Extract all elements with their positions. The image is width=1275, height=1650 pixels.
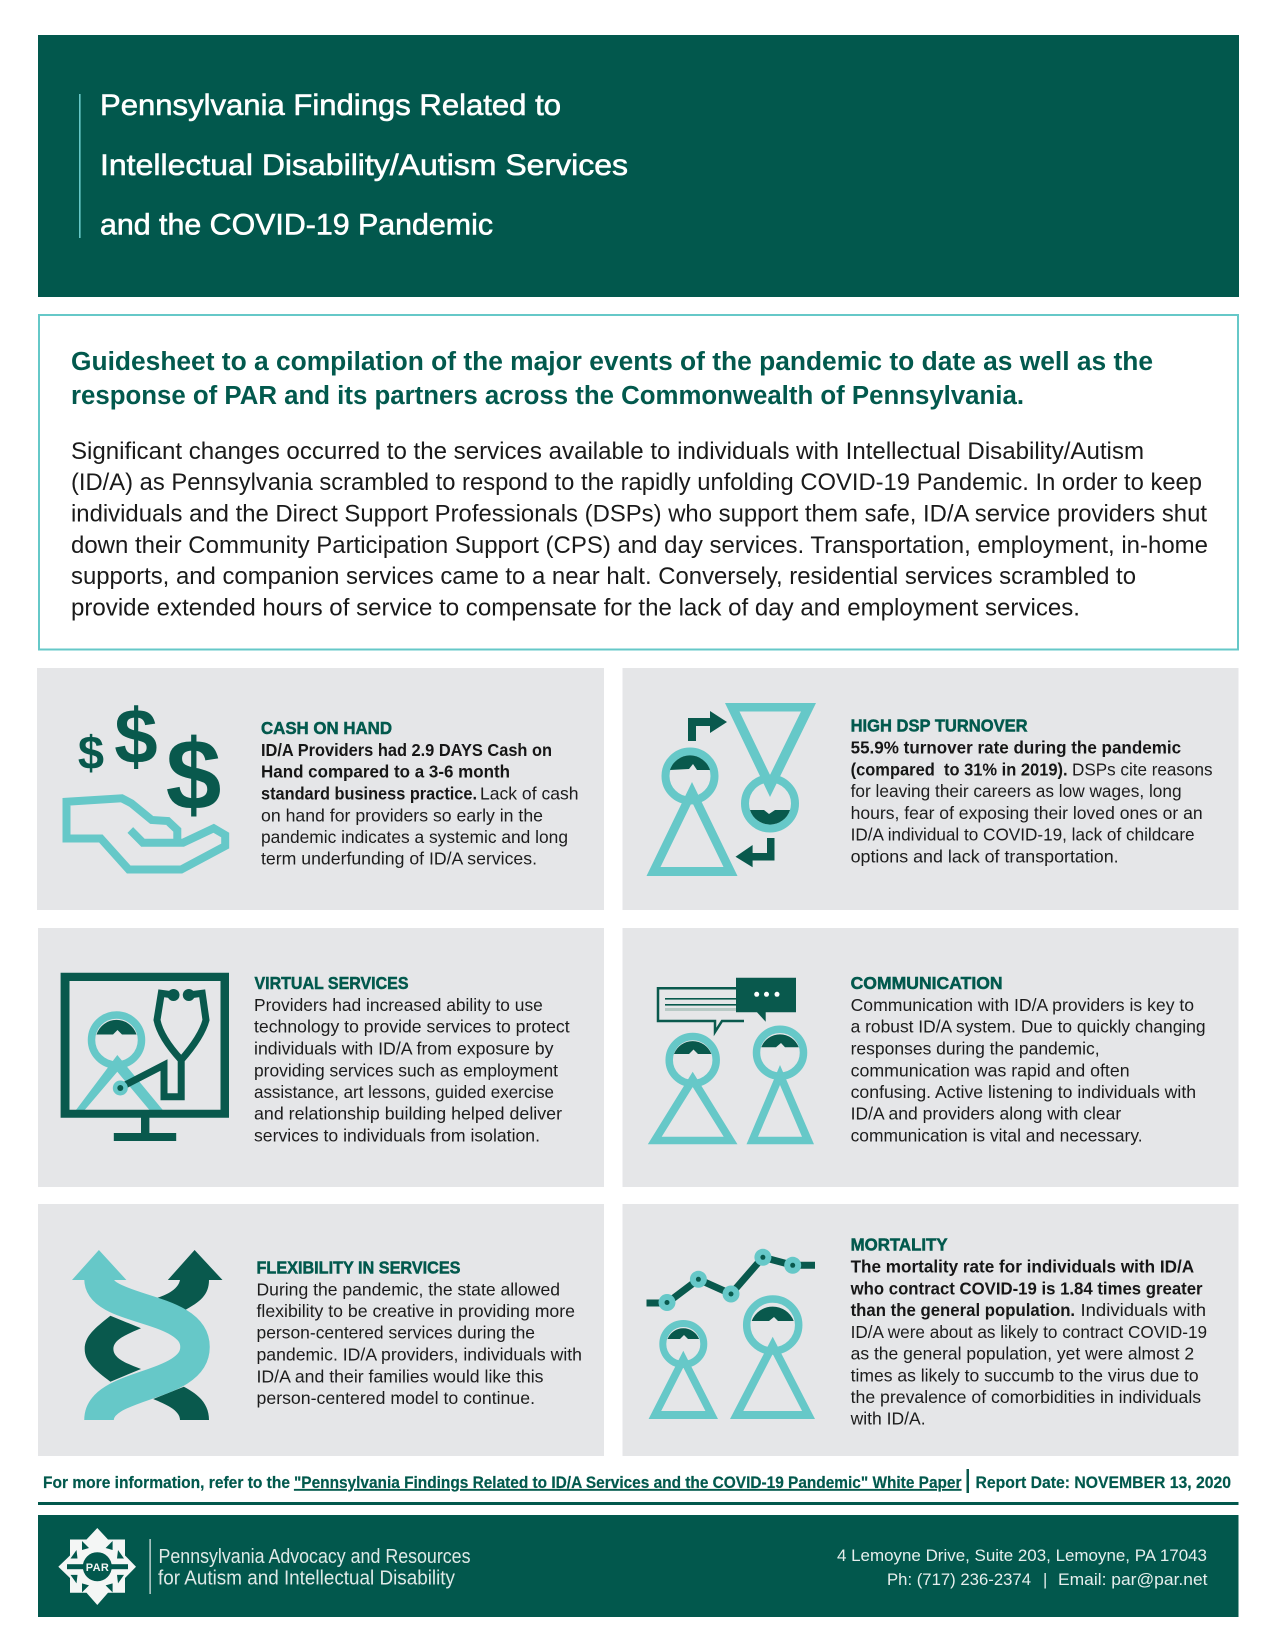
footer band xyxy=(38,1515,1238,1617)
panel: mortality xyxy=(622,1204,1238,1456)
panel: communication xyxy=(622,928,1238,1187)
introduction heading xyxy=(71,348,1153,410)
arrow: bottom xyxy=(736,838,774,867)
introduction body text: Significant changes occurred to the services available to individuals with Intellectual Disability/Autism xyxy=(71,438,1144,465)
icon: hand with dollar signs xyxy=(66,692,225,870)
icon: hand with dollar signs: $ xyxy=(78,726,104,779)
virtual services text: providing services such as employment xyxy=(254,1060,558,1080)
reference line: "Pennsylvania Findings Related to ID/A Services and the COVID-19 Pandemic" White Paper xyxy=(294,1474,962,1492)
icon: stethoscope xyxy=(113,989,206,1097)
introduction body text: supports, and companion services came to a near halt. Conversely, residential services scrambled to xyxy=(71,563,1136,590)
high DSP turnover text: options and lack of transportation. xyxy=(851,846,1119,866)
high DSP turnover text: (compared to 31% in 2019). xyxy=(851,759,1068,779)
flexibility in services text xyxy=(256,1257,582,1408)
introduction body text: provide extended hours of service to compensate for the lack of day and employment services. xyxy=(71,594,1080,622)
reference line: For more information, refer to the xyxy=(43,1474,290,1492)
reference line xyxy=(43,1469,1231,1493)
contact details: Ph: (717) 236-2374 xyxy=(887,1571,1031,1589)
icon: intertwined arrows xyxy=(72,1250,222,1420)
communication text: Communication with ID/A providers is key to xyxy=(851,995,1194,1015)
cash on hand text: pandemic indicates a systemic and long xyxy=(261,827,568,847)
title xyxy=(100,89,628,242)
communication text: COMMUNICATION xyxy=(851,973,1003,993)
introduction body text: individuals and the Direct Support Professionals (DSPs) who support them safe, ID/A service providers shut xyxy=(71,500,1207,528)
cash on hand text: Hand compared to a 3-6 month xyxy=(261,762,510,782)
mortality text xyxy=(850,1235,1207,1429)
virtual services text xyxy=(254,973,570,1145)
contact details: | xyxy=(1043,1571,1047,1589)
communication text: a robust ID/A system. Due to quickly changing xyxy=(851,1017,1206,1037)
virtual services text: services to individuals from isolation. xyxy=(254,1125,540,1145)
flexibility in services text: person-centered services during the xyxy=(256,1323,535,1343)
icon: hand with dollar signs: $ xyxy=(166,719,221,831)
panel: introduction xyxy=(39,315,1238,650)
mortality text: with ID/A. xyxy=(850,1409,926,1429)
panel: cash on hand xyxy=(37,668,604,910)
flexibility in services text: flexibility to be creative in providing more xyxy=(256,1301,575,1321)
organization name: Pennsylvania Advocacy and Resources xyxy=(158,1546,470,1568)
virtual services text: individuals with ID/A from exposure by xyxy=(254,1039,554,1059)
organization name xyxy=(158,1546,470,1590)
virtual services text: VIRTUAL SERVICES xyxy=(254,973,408,993)
reference line: Report Date: NOVEMBER 13, 2020 xyxy=(976,1474,1231,1492)
cash on hand text: CASH ON HAND xyxy=(261,718,392,738)
panel: virtual services xyxy=(38,928,604,1187)
communication text: ID/A and providers along with clear xyxy=(851,1104,1121,1124)
flexibility in services text: During the pandemic, the state allowed xyxy=(256,1279,560,1299)
flexibility in services text: person-centered model to continue. xyxy=(256,1388,535,1408)
mortality text: who contract COVID-19 is 1.84 times greater xyxy=(850,1278,1203,1298)
mortality text: ID/A were about as likely to contract COVID-19 xyxy=(851,1322,1207,1342)
flexibility in services text: pandemic. ID/A providers, individuals with xyxy=(256,1345,582,1365)
icon: hand with dollar signs: $ xyxy=(114,692,158,780)
mortality text: Individuals with xyxy=(1080,1300,1206,1320)
icon: two people talking xyxy=(648,978,814,1144)
icon: two people swapping xyxy=(646,703,816,876)
introduction heading: Guidesheet to a compilation of the major events of the pandemic to date as well as the xyxy=(71,348,1153,376)
cash on hand text xyxy=(261,718,578,869)
mortality text: than the general population. xyxy=(851,1300,1075,1320)
introduction body text: down their Community Participation Support (CPS) and day services. Transportation, employment, in-home xyxy=(71,532,1208,559)
header banner xyxy=(38,35,1239,297)
icon: line chart with two people xyxy=(646,1249,815,1419)
high DSP turnover text: DSPs cite reasons xyxy=(1072,759,1213,779)
cash on hand text: ID/A Providers had 2.9 DAYS Cash on xyxy=(261,740,552,760)
communication text: communication was rapid and often xyxy=(851,1060,1130,1080)
flexibility in services text: ID/A and their families would like this xyxy=(256,1366,544,1386)
panel: flexibility in services xyxy=(38,1204,604,1456)
communication text: communication is vital and necessary. xyxy=(851,1125,1143,1145)
icon: PAR logo xyxy=(58,1528,136,1605)
panel: high DSP turnover xyxy=(622,668,1238,910)
contact details: 4 Lemoyne Drive, Suite 203, Lemoyne, PA 17043 xyxy=(837,1547,1207,1565)
flexibility in services text: FLEXIBILITY IN SERVICES xyxy=(256,1257,460,1277)
high DSP turnover text: hours, fear of exposing their loved ones or an xyxy=(851,803,1203,823)
title: Intellectual Disability/Autism Services xyxy=(100,149,628,182)
high DSP turnover text: 55.9% turnover rate during the pandemic xyxy=(851,738,1181,758)
cash on hand text: Lack of cash xyxy=(480,784,578,804)
mortality text: times as likely to succumb to the virus due to xyxy=(851,1365,1199,1385)
introduction body text xyxy=(71,438,1208,622)
icon: PAR logo: PAR xyxy=(86,1562,109,1574)
high DSP turnover text: HIGH DSP TURNOVER xyxy=(851,716,1028,736)
icon: monitor with doctor and stethoscope xyxy=(61,973,229,1141)
virtual services text: technology to provide services to protect xyxy=(254,1017,570,1037)
organization name: for Autism and Intellectual Disability xyxy=(158,1568,455,1590)
title: and the COVID-19 Pandemic xyxy=(100,208,493,242)
communication text: confusing. Active listening to individuals with xyxy=(851,1082,1196,1102)
high DSP turnover text: for leaving their careers as low wages, long xyxy=(851,781,1182,801)
cash on hand text: on hand for providers so early in the xyxy=(261,805,543,825)
introduction heading: response of PAR and its partners across the Commonwealth of Pennsylvania. xyxy=(71,382,1024,410)
title: Pennsylvania Findings Related to xyxy=(100,89,561,122)
communication text xyxy=(851,973,1206,1145)
high DSP turnover text: ID/A individual to COVID-19, lack of childcare xyxy=(851,825,1195,845)
mortality text: The mortality rate for individuals with ID/A xyxy=(851,1257,1194,1277)
mortality text: MORTALITY xyxy=(851,1235,948,1255)
contact details: Email: par@par.net xyxy=(1058,1571,1208,1589)
arrow: top xyxy=(688,711,727,741)
high DSP turnover text xyxy=(851,716,1213,866)
virtual services text: Providers had increased ability to use xyxy=(254,995,543,1015)
contact details xyxy=(837,1547,1208,1589)
cash on hand text: term underfunding of ID/A services. xyxy=(261,849,537,869)
cash on hand text: standard business practice. xyxy=(261,784,477,804)
virtual services text: assistance, art lessons, guided exercise xyxy=(254,1082,554,1102)
mortality text: the prevalence of comorbidities in individuals xyxy=(851,1387,1201,1407)
virtual services text: and relationship building helped deliver xyxy=(254,1104,562,1124)
communication text: responses during the pandemic, xyxy=(851,1039,1100,1059)
mortality text: as the general population, yet were almost 2 xyxy=(851,1344,1194,1364)
introduction body text: (ID/A) as Pennsylvania scrambled to respond to the rapidly unfolding COVID-19 Pandemic. In order to keep xyxy=(71,469,1202,496)
